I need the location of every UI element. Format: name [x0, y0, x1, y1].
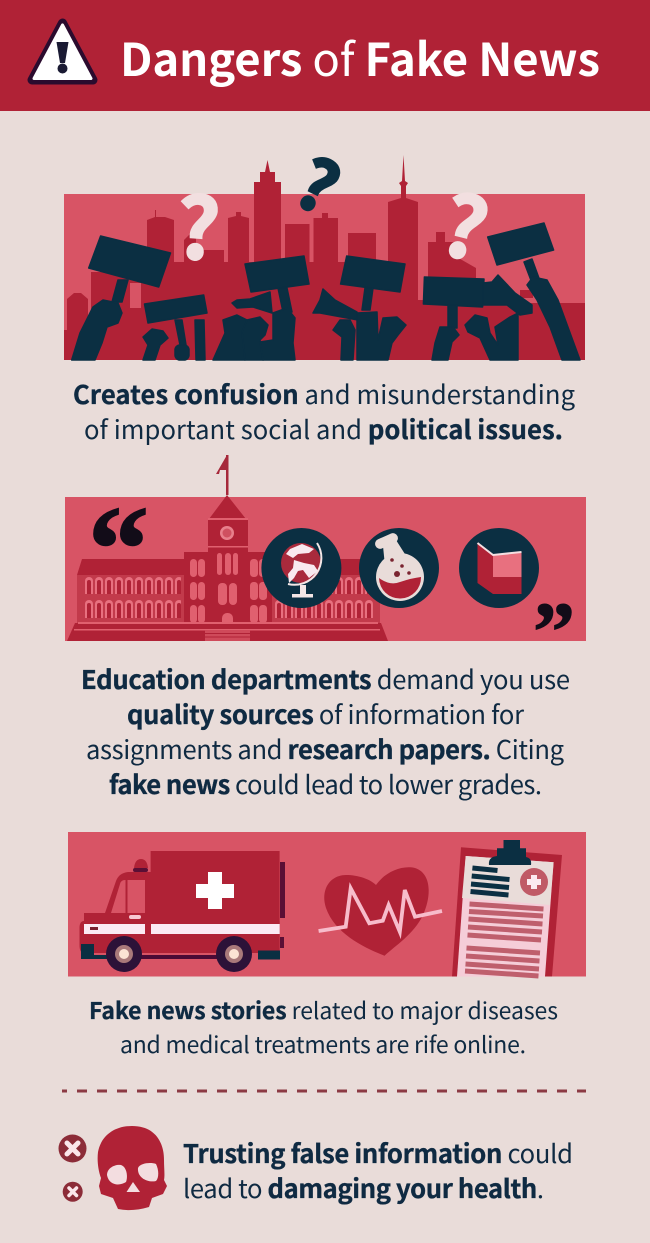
text: education: assignments and research papers. Citing — [86, 730, 565, 767]
text: education — [81, 660, 570, 802]
closing quote mark: ” — [533, 586, 575, 679]
panel: protest illustration — [64, 129, 585, 360]
panel: protest illustration: ? — [281, 129, 358, 236]
icon: x badge large — [58, 1134, 86, 1162]
icon: book — [459, 528, 539, 608]
text: confusion: Creates confusion and misunderstanding — [73, 375, 576, 412]
header banner — [0, 0, 650, 111]
heart with pulse line — [319, 867, 442, 956]
icon: warning triangle — [32, 23, 93, 80]
clipboard — [452, 840, 562, 976]
ambulance — [80, 851, 285, 972]
text: education: fake news could lead to lower grades. — [109, 765, 542, 802]
panel: health illustration — [68, 832, 586, 976]
panel: education illustration — [65, 455, 586, 679]
icon: flask — [359, 528, 439, 608]
panel: protest illustration: ? — [430, 159, 501, 287]
icon: skull — [98, 1126, 167, 1210]
text: confusion: of important social and political issues. — [84, 410, 563, 447]
university building — [67, 455, 388, 641]
icon: globe — [261, 528, 341, 608]
callout: skull warning — [58, 1126, 573, 1210]
title: Dangers of Fake News — [120, 24, 600, 90]
protest signs and raised arms — [72, 223, 580, 360]
text: health warning: Trusting false information could — [183, 1134, 573, 1171]
text: confusion — [73, 375, 576, 447]
text: health: Fake news stories related to major diseases — [89, 992, 558, 1026]
text: health warning — [183, 1134, 573, 1206]
question marks: ? — [173, 162, 224, 285]
text: health warning: lead to damaging your health. — [183, 1169, 544, 1206]
text: health — [89, 992, 558, 1060]
city skyline — [64, 155, 585, 360]
text: health: and medical treatments are rife online. — [120, 1026, 526, 1060]
text: education: quality sources of information for — [127, 695, 524, 732]
icon: x badge small — [63, 1182, 83, 1202]
opening quote mark: “ — [88, 482, 149, 617]
text: education: Education departments demand you use — [81, 660, 570, 697]
